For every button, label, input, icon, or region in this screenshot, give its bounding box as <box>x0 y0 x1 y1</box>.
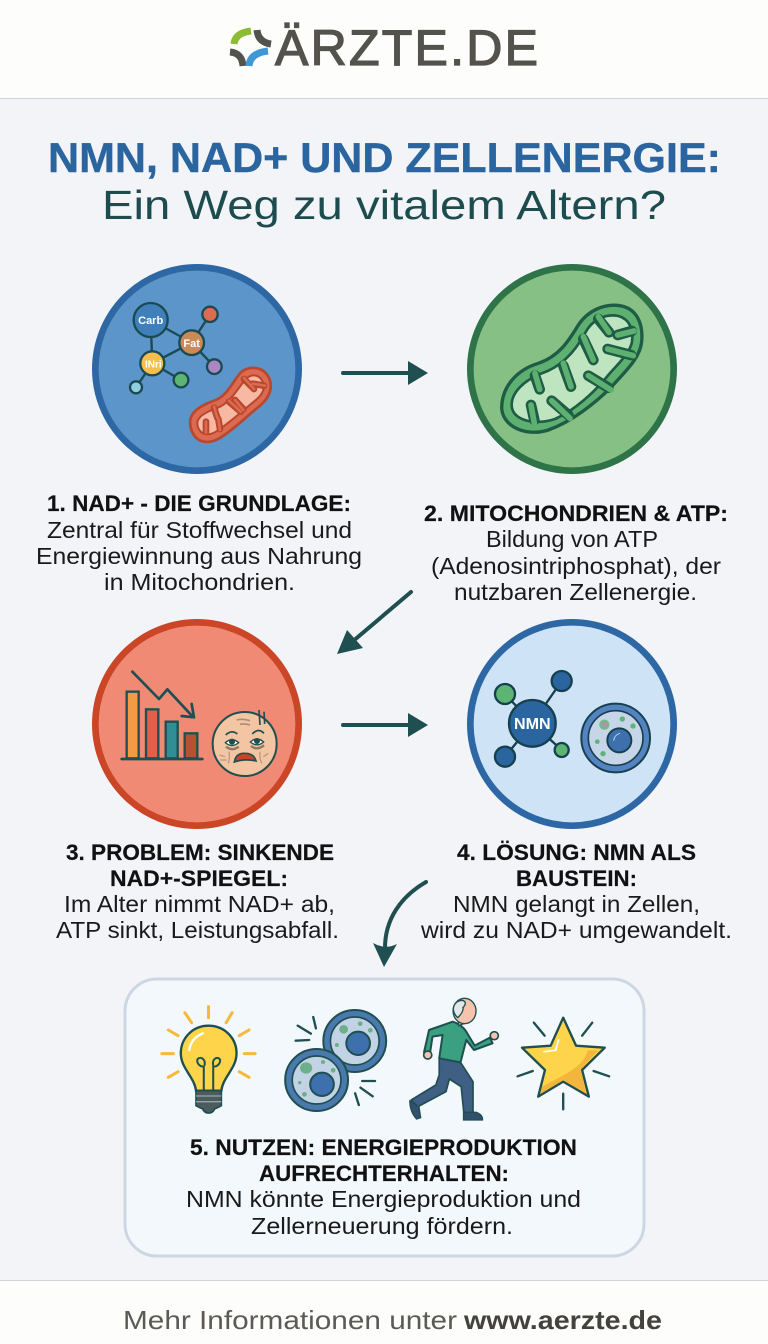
text block: step 3: ATP sinkt, Leistungsabfall. <box>56 917 339 943</box>
text block: step 5: Zellerneuerung fördern. <box>251 1213 513 1239</box>
icon: cells <box>285 1010 386 1111</box>
text block: step 4: 4. LÖSUNG: NMN ALS <box>457 840 696 865</box>
arrow: step 2 to 3 <box>337 592 411 654</box>
text block: step 4: NMN gelangt in Zellen, <box>453 891 700 917</box>
icon: mitochondrion <box>470 267 674 471</box>
footer: www.aerzte.de <box>463 1305 662 1335</box>
icon: nutrients and mitochondrion: Carb <box>138 315 163 327</box>
arrow: step 3 to 4 <box>343 713 428 737</box>
text block: step 3 <box>56 840 339 943</box>
title: NMN, NAD+ UND ZELLENERGIE: <box>48 134 721 181</box>
text block: step 3: NAD+-SPIEGEL: <box>110 866 288 891</box>
title <box>48 134 721 228</box>
text block: step 2: Bildung von ATP <box>486 526 658 552</box>
footer: Mehr Informationen unter <box>123 1305 457 1335</box>
icon: NMN molecule and cell: NMN <box>514 716 551 733</box>
logo wordmark: ÄRZTE.DE <box>275 20 538 76</box>
text block: step 2: nutzbaren Zellenergie. <box>454 579 697 605</box>
icon: declining chart and tired face <box>95 622 299 826</box>
text block: step 5: NMN könnte Energieproduktion und <box>186 1186 581 1212</box>
logo icon <box>230 30 271 66</box>
icon: running senior <box>410 998 498 1120</box>
text block: step 4: wird zu NAD+ umgewandelt. <box>420 917 732 943</box>
icons row <box>162 998 609 1120</box>
title: Ein Weg zu vitalem Altern? <box>102 182 666 228</box>
text block: step 2 <box>424 501 728 605</box>
text block: step 4 <box>420 840 732 943</box>
icon: star <box>518 1018 609 1109</box>
icon: nutrients and mitochondrion <box>95 267 299 471</box>
text block: step 2: (Adenosintriphosphat), der <box>431 553 721 579</box>
text block: step 1: in Mitochondrien. <box>104 569 295 595</box>
arrow: step 4 to 5 <box>373 882 426 967</box>
text block: step 4: BAUSTEIN: <box>516 866 637 891</box>
text block: step 5 <box>186 1135 581 1239</box>
text block: step 1: Energiewinnung aus Nahrung <box>36 543 362 569</box>
text block: step 5: 5. NUTZEN: ENERGIEPRODUKTION <box>190 1135 577 1160</box>
text block: step 2: 2. MITOCHONDRIEN & ATP: <box>424 501 728 526</box>
text block: step 1: Zentral für Stoffwechsel und <box>47 517 352 543</box>
header with logo <box>0 0 768 99</box>
footer <box>0 1280 768 1344</box>
panel: benefit <box>125 979 644 1256</box>
text block: step 3: 3. PROBLEM: SINKENDE <box>66 840 334 865</box>
icon: nutrients and mitochondrion: INri <box>145 359 162 370</box>
text block: step 1: 1. NAD+ - DIE GRUNDLAGE: <box>47 491 351 516</box>
text block: step 1 <box>36 491 362 595</box>
text block: step 3: Im Alter nimmt NAD+ ab, <box>64 891 335 917</box>
icon: light bulb <box>162 1007 255 1113</box>
icon: nutrients and mitochondrion: Fat <box>183 338 200 350</box>
icon: NMN molecule and cell <box>470 622 674 826</box>
text block: step 5: AUFRECHTERHALTEN: <box>259 1161 509 1186</box>
arrow: step 1 to 2 <box>343 361 428 385</box>
